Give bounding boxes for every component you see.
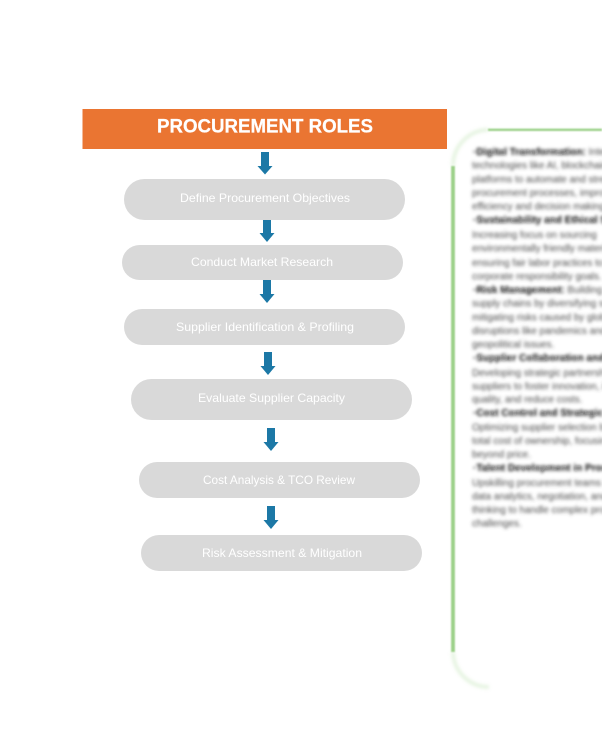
trend: digital transformation [472, 147, 602, 212]
step 5: cost analysis [139, 462, 420, 498]
arrow: step 1 to step 2 [260, 220, 274, 242]
trend: sustainability: Increasing focus on sourcing [472, 230, 597, 241]
step 6: risk assessment: Risk Assessment & Mitigation [202, 546, 362, 560]
flowchart of procurement steps [122, 152, 422, 571]
step 1: define objectives: Define Procurement Objectives [180, 191, 350, 205]
step 4: supplier capacity [131, 379, 412, 420]
frame edges [453, 130, 602, 652]
title: PROCUREMENT ROLES [157, 116, 373, 138]
frame rounded corners [453, 130, 489, 687]
trend: supplier collaboration [472, 353, 602, 406]
arrow: step 5 to step 6 [264, 506, 278, 529]
step 2: market research [122, 245, 403, 280]
step 3: supplier identification [124, 309, 405, 345]
text block: procurement trends [472, 147, 602, 530]
step 5: cost analysis: Cost Analysis & TCO Review [203, 473, 355, 487]
trend: sustainability: corporate responsibility goals. [472, 272, 602, 282]
step 6: risk assessment [141, 535, 422, 571]
step 4: supplier capacity: Evaluate Supplier Capacity [198, 391, 345, 405]
arrow: step 2 to step 3 [260, 280, 274, 303]
trend: risk management: geopolitical issues. [472, 340, 554, 350]
trend: talent development [472, 463, 602, 530]
arrow: banner to step 1 [258, 152, 272, 174]
trend: risk management: disruptions like pandemics and [472, 326, 602, 337]
trend: talent development: challenges. [472, 518, 522, 530]
title banner [82, 109, 447, 149]
step 2: market research: Conduct Market Research [191, 255, 333, 269]
trend: sustainability [472, 215, 602, 282]
arrow: step 3 to step 4 [260, 352, 276, 375]
trend: cost control [472, 408, 602, 460]
trend: cost control: beyond price. [472, 450, 531, 460]
trend: risk management [472, 285, 602, 350]
step 1: define objectives [124, 179, 405, 220]
trend: supplier collaboration: quality, and reduce costs. [472, 394, 582, 406]
step 3: supplier identification: Supplier Identification & Profiling [176, 320, 354, 334]
arrow: step 4 to step 5 [264, 428, 278, 451]
panel: green frame [453, 130, 602, 687]
